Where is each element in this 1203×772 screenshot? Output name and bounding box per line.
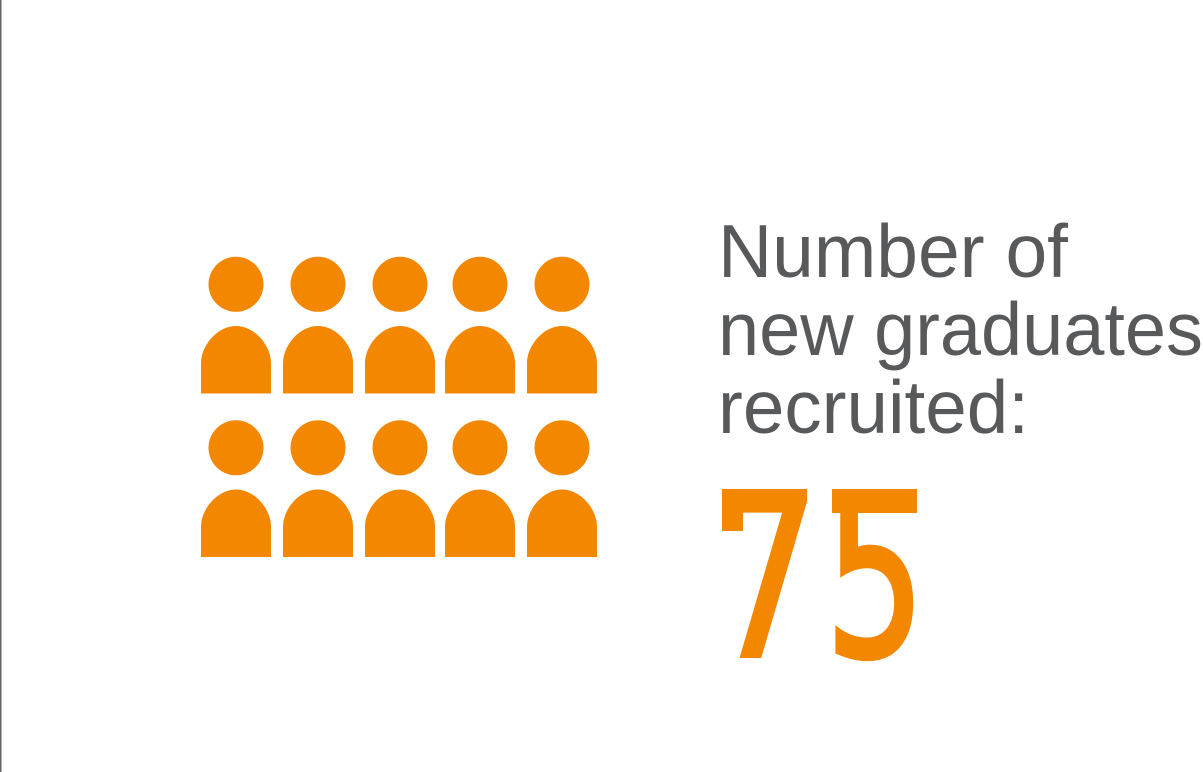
icon: grid of ten people bbox=[201, 257, 597, 557]
label text: recruited: bbox=[718, 365, 1029, 449]
big number 75: 5 bbox=[825, 447, 925, 709]
label text: Number of bbox=[718, 209, 1068, 293]
label text bbox=[718, 209, 1203, 449]
icon: row 2 of people bbox=[201, 420, 597, 557]
label text: new graduates bbox=[718, 287, 1203, 371]
big number 75 bbox=[711, 447, 925, 710]
big number 75: 7 bbox=[711, 448, 820, 710]
icon: row 1 of people bbox=[201, 257, 597, 394]
